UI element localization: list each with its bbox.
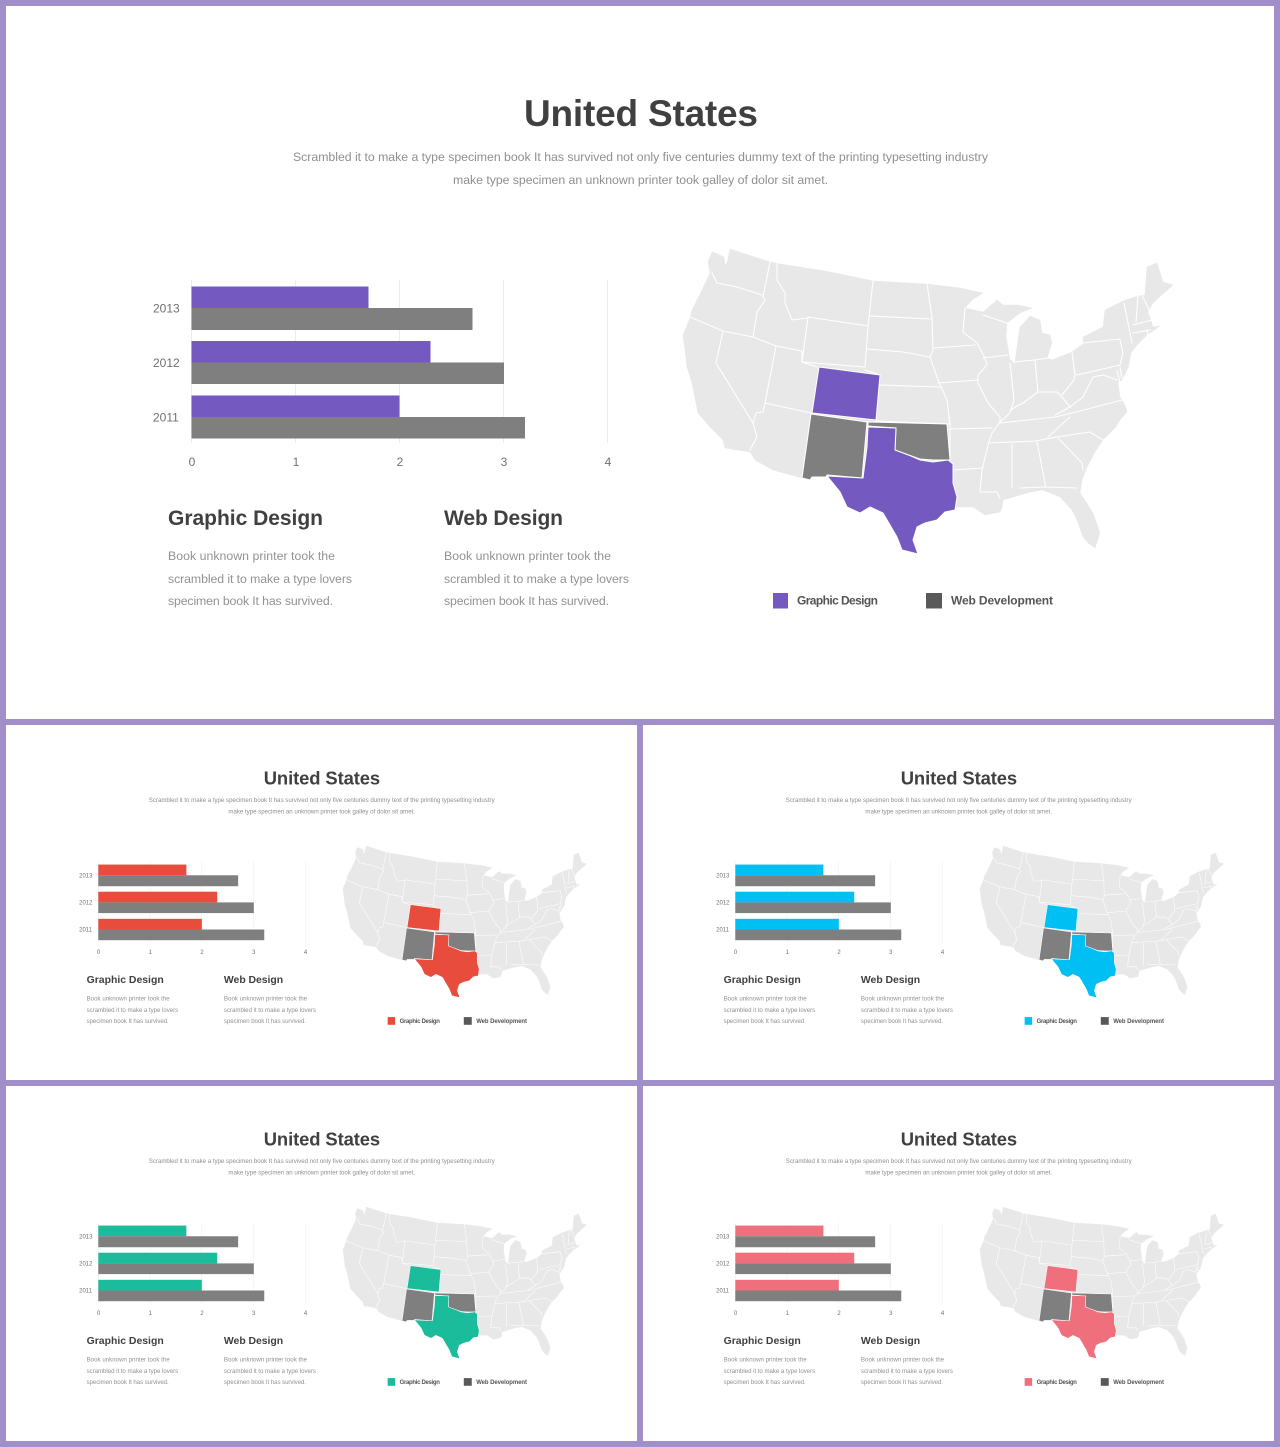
bar chart: 0 <box>734 1311 738 1317</box>
text block: Graphic Design: specimen book It has survived. <box>168 594 333 608</box>
text block: Web Design: Web Design <box>444 507 563 530</box>
text block: Web Design: Book unknown printer took the <box>224 996 308 1003</box>
bar chart: 4 <box>605 455 612 469</box>
panel background <box>6 6 1274 719</box>
text block: Graphic Design <box>87 975 178 1025</box>
bar chart: 3 <box>889 1311 893 1317</box>
text block: Graphic Design: Book unknown printer took the <box>87 1357 170 1364</box>
bar chart: 2 <box>397 455 404 469</box>
text block: Web Design: specimen book It has survived. <box>224 1379 306 1386</box>
title: United States <box>901 1129 1017 1150</box>
subtitle text: Scrambled it to make a type specimen book It has survived not only five centuries dummy text of the printing typesetting industry <box>149 1158 496 1165</box>
bar chart: 3 <box>889 950 893 956</box>
legend <box>388 1378 527 1386</box>
text block: Graphic Design: scrambled it to make a type lovers <box>724 1007 815 1014</box>
legend: Graphic Design <box>400 1380 440 1386</box>
US map <box>343 846 587 998</box>
bar chart: 2011 <box>153 410 179 424</box>
bar chart: 2013 <box>716 1235 730 1241</box>
bar chart: 2012 <box>716 1262 730 1268</box>
bar chart: 3 <box>252 950 256 956</box>
text block: Web Design <box>444 507 629 608</box>
bar chart: 2 <box>200 950 204 956</box>
text block: Web Design: specimen book It has survived. <box>861 1379 943 1386</box>
panel background <box>6 1086 637 1441</box>
subtitle text: Scrambled it to make a type specimen book It has survived not only five centuries dummy text of the printing typesetting industry <box>293 150 989 164</box>
bar chart: 2011 <box>716 928 730 934</box>
legend <box>1025 1378 1164 1386</box>
panel background <box>6 725 637 1080</box>
text block: Graphic Design: scrambled it to make a type lovers <box>87 1007 178 1014</box>
bar chart: 2011 <box>79 928 93 934</box>
bar chart: 2013 <box>79 874 93 880</box>
bar chart: 1 <box>149 950 153 956</box>
legend: Web Development <box>476 1380 527 1386</box>
text block: Web Design: scrambled it to make a type lovers <box>444 572 629 586</box>
bar chart: 2 <box>837 950 841 956</box>
subtitle text: Scrambled it to make a type specimen book It has survived not only five centuries dummy text of the printing typesetting industry <box>149 797 496 804</box>
text block: Web Design: Web Design <box>861 1336 920 1347</box>
text block: Web Design <box>861 975 953 1025</box>
bar chart: 3 <box>252 1311 256 1317</box>
text block: Web Design: Book unknown printer took the <box>861 996 945 1003</box>
bar chart: 2012 <box>716 901 730 907</box>
bar chart: 2013 <box>153 302 180 316</box>
slide content <box>716 768 1224 1025</box>
bar chart: 2012 <box>79 1262 93 1268</box>
legend: Web Development <box>951 594 1053 608</box>
title: United States <box>264 768 380 789</box>
subtitle text <box>149 1158 496 1177</box>
legend <box>1025 1017 1164 1025</box>
legend <box>773 593 1053 608</box>
bar chart <box>716 861 945 956</box>
bar chart: 4 <box>941 950 945 956</box>
bar chart: 4 <box>304 1311 308 1317</box>
panel: main slide purple <box>6 6 1274 719</box>
legend: Graphic Design <box>400 1019 440 1025</box>
text block: Web Design: specimen book It has survived. <box>861 1018 943 1025</box>
bar chart: 2012 <box>79 901 93 907</box>
text block: Graphic Design: Book unknown printer took the <box>168 549 335 563</box>
text block: Graphic Design: specimen book It has survived. <box>87 1379 169 1386</box>
text block: Web Design: Book unknown printer took the <box>861 1357 945 1364</box>
panel: small slide red <box>6 725 637 1080</box>
subtitle text: make type specimen an unknown printer took galley of dolor sit amet. <box>865 1170 1052 1177</box>
bar chart <box>79 861 308 956</box>
text block: Web Design <box>861 1336 953 1386</box>
panel: small slide pink <box>643 1086 1274 1441</box>
panel background <box>643 1086 1274 1441</box>
bar chart: 2 <box>200 1311 204 1317</box>
US map <box>343 1207 587 1359</box>
text block: Graphic Design: scrambled it to make a type lovers <box>168 572 352 586</box>
subtitle text <box>149 797 496 816</box>
text block: Graphic Design: scrambled it to make a type lovers <box>87 1368 178 1375</box>
title: United States <box>264 1129 380 1150</box>
legend: Web Development <box>1113 1019 1164 1025</box>
text block: Web Design: specimen book It has survived. <box>444 594 609 608</box>
legend: Graphic Design <box>1037 1019 1077 1025</box>
panel background <box>643 725 1274 1080</box>
subtitle text: make type specimen an unknown printer took galley of dolor sit amet. <box>228 809 415 816</box>
bar chart: 1 <box>149 1311 153 1317</box>
US map <box>980 846 1224 998</box>
text block: Graphic Design <box>168 507 352 608</box>
bar chart: 0 <box>734 950 738 956</box>
bar chart: 1 <box>786 950 790 956</box>
slide content <box>79 768 587 1025</box>
title: United States <box>901 768 1017 789</box>
legend: Graphic Design <box>1037 1380 1077 1386</box>
bar chart: 2013 <box>716 874 730 880</box>
text block: Graphic Design: specimen book It has survived. <box>87 1018 169 1025</box>
subtitle text: make type specimen an unknown printer took galley of dolor sit amet. <box>228 1170 415 1177</box>
text block: Graphic Design: scrambled it to make a type lovers <box>724 1368 815 1375</box>
text block: Graphic Design <box>724 1336 815 1386</box>
bar chart: 4 <box>304 950 308 956</box>
text block: Graphic Design: specimen book It has survived. <box>724 1379 806 1386</box>
bar chart: 2 <box>837 1311 841 1317</box>
text block: Graphic Design: Book unknown printer took the <box>724 1357 807 1364</box>
bar chart: 4 <box>941 1311 945 1317</box>
text block: Graphic Design <box>87 1336 178 1386</box>
bar chart: 2011 <box>716 1289 730 1295</box>
slide content <box>716 1129 1224 1386</box>
slide content <box>79 1129 587 1386</box>
legend: Graphic Design <box>797 594 878 608</box>
text block: Web Design: specimen book It has survived. <box>224 1018 306 1025</box>
text block: Web Design: scrambled it to make a type lovers <box>861 1368 953 1375</box>
legend: Web Development <box>476 1019 527 1025</box>
bar chart: 1 <box>786 1311 790 1317</box>
text block: Web Design: Web Design <box>861 975 920 986</box>
bar chart: 0 <box>97 1311 101 1317</box>
bar chart: 2013 <box>79 1235 93 1241</box>
text block: Graphic Design <box>724 975 815 1025</box>
text block: Graphic Design: Graphic Design <box>724 1336 801 1347</box>
subtitle text: make type specimen an unknown printer took galley of dolor sit amet. <box>865 809 1052 816</box>
subtitle text: Scrambled it to make a type specimen book It has survived not only five centuries dummy text of the printing typesetting industry <box>786 1158 1133 1165</box>
bar chart: 0 <box>189 455 196 469</box>
bar chart: 2012 <box>153 356 180 370</box>
bar chart: 2011 <box>79 1289 93 1295</box>
text block: Graphic Design: Graphic Design <box>724 975 801 986</box>
bar chart: 1 <box>293 455 300 469</box>
subtitle text: make type specimen an unknown printer took galley of dolor sit amet. <box>453 173 828 187</box>
text block: Web Design: scrambled it to make a type lovers <box>861 1007 953 1014</box>
bar chart <box>153 280 612 469</box>
text block: Web Design: Book unknown printer took the <box>224 1357 308 1364</box>
bar chart <box>716 1222 945 1317</box>
bar chart <box>79 1222 308 1317</box>
text block: Graphic Design: Book unknown printer took the <box>724 996 807 1003</box>
subtitle text <box>786 797 1133 816</box>
text block: Web Design: scrambled it to make a type lovers <box>224 1368 316 1375</box>
legend: Web Development <box>1113 1380 1164 1386</box>
subtitle text: Scrambled it to make a type specimen book It has survived not only five centuries dummy text of the printing typesetting industry <box>786 797 1133 804</box>
text block: Web Design <box>224 1336 316 1386</box>
bar chart: 3 <box>501 455 508 469</box>
subtitle text <box>786 1158 1133 1177</box>
text block: Web Design: Web Design <box>224 1336 283 1347</box>
US map <box>683 249 1173 554</box>
US map <box>980 1207 1224 1359</box>
text block: Graphic Design: Graphic Design <box>87 1336 164 1347</box>
text block: Graphic Design: specimen book It has survived. <box>724 1018 806 1025</box>
title: United States <box>524 93 758 134</box>
text block: Graphic Design: Graphic Design <box>87 975 164 986</box>
text block: Graphic Design: Graphic Design <box>168 507 323 530</box>
text block: Graphic Design: Book unknown printer took the <box>87 996 170 1003</box>
panel: small slide green <box>6 1086 637 1441</box>
text block: Web Design: scrambled it to make a type lovers <box>224 1007 316 1014</box>
text block: Web Design: Book unknown printer took the <box>444 549 611 563</box>
legend <box>388 1017 527 1025</box>
bar chart: 0 <box>97 950 101 956</box>
text block: Web Design: Web Design <box>224 975 283 986</box>
panel: small slide blue <box>643 725 1274 1080</box>
subtitle text <box>293 150 989 187</box>
text block: Web Design <box>224 975 316 1025</box>
